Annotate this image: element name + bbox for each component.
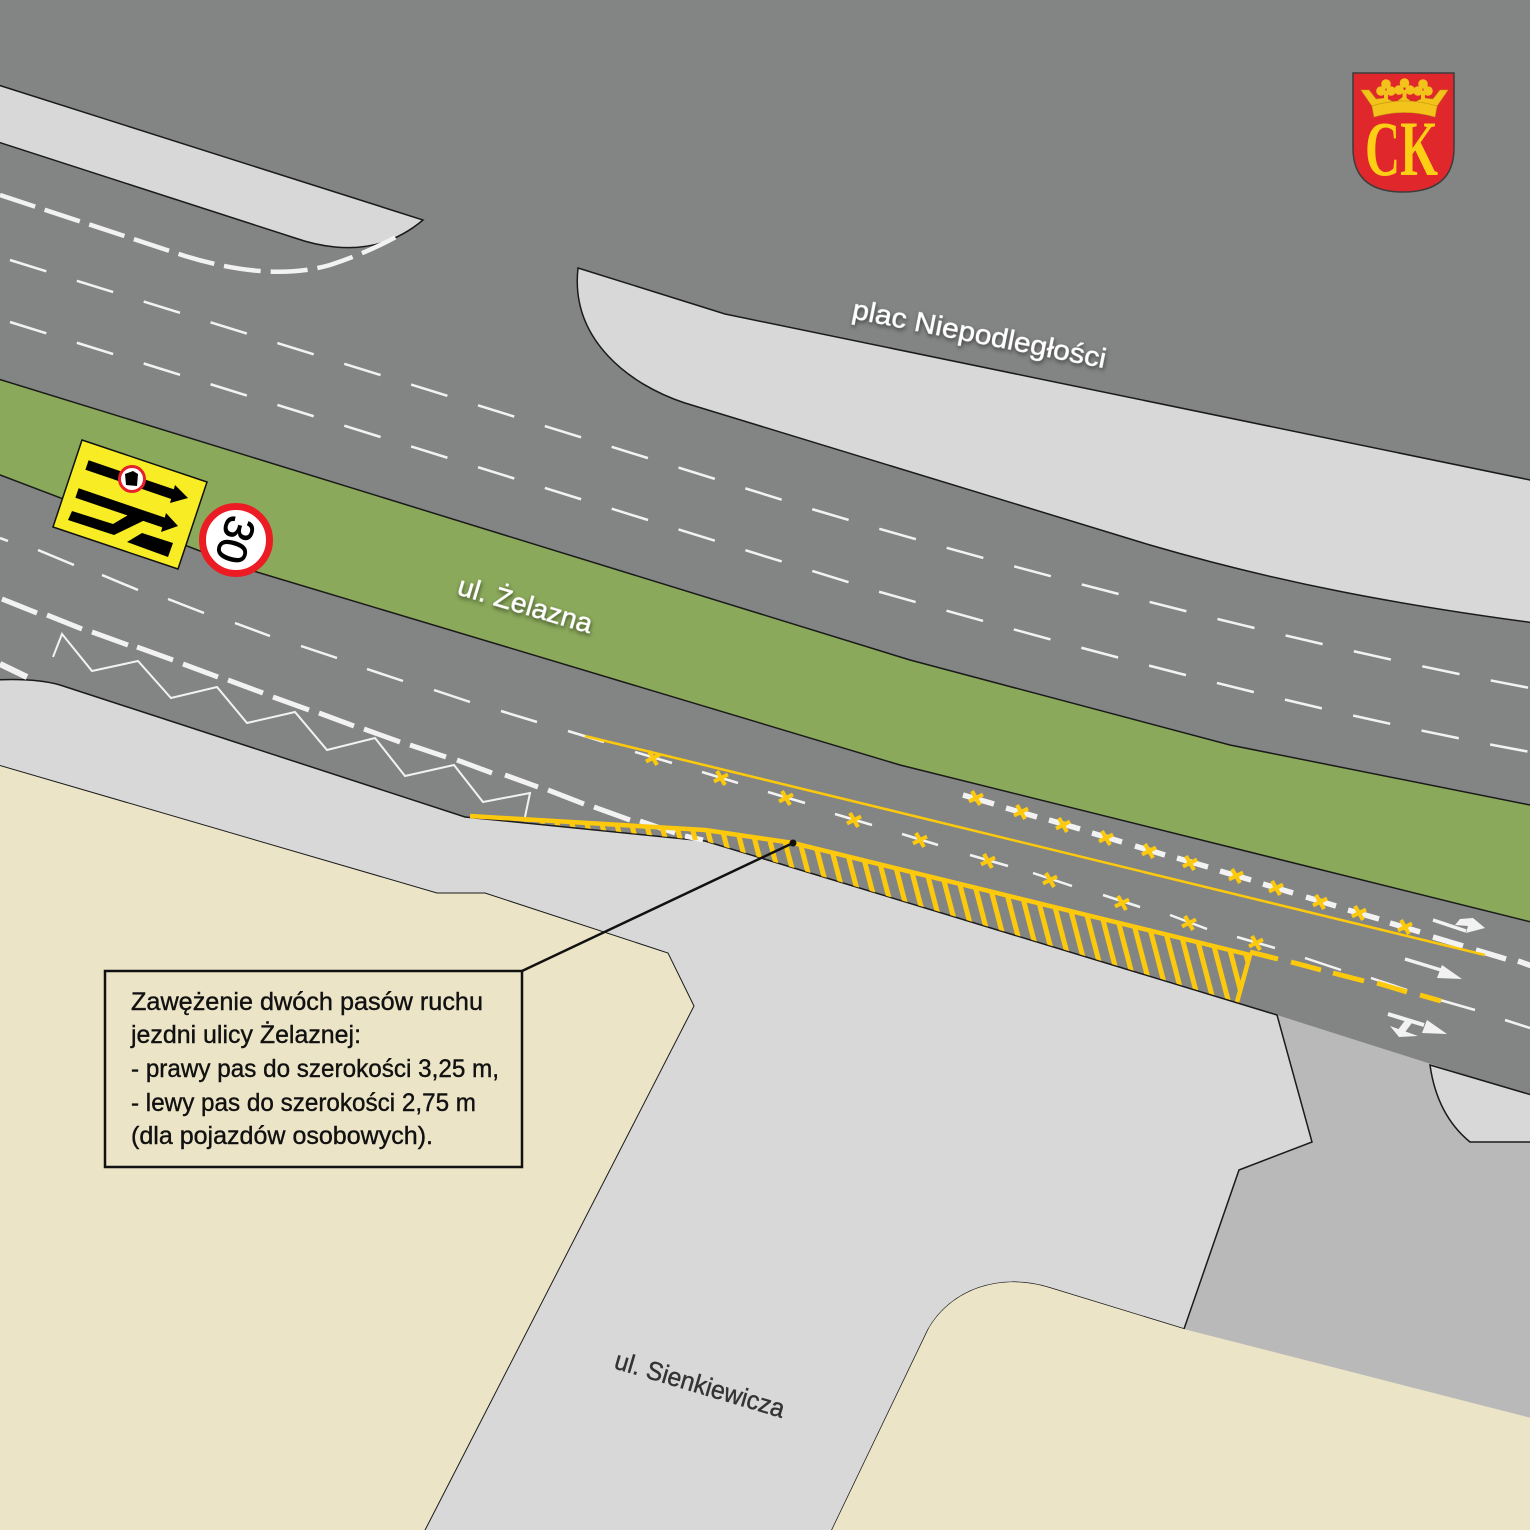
callout leader line — [522, 840, 796, 971]
callout box: (dla pojazdów osobowych). — [131, 1122, 433, 1150]
thick dash at road edge — [0, 664, 27, 677]
green median strip — [0, 378, 1530, 923]
label: ul. Żelazna: ul. Żelazna — [454, 570, 597, 639]
yellow cancel crosses — [646, 751, 1412, 950]
yellow hatched narrowing area — [470, 816, 1250, 1002]
callout box: - lewy pas do szerokości 2,75 m — [131, 1089, 476, 1117]
coat of arms of Kielce: CK — [1365, 105, 1438, 192]
callout box: Zawężenie dwóch pasów ruchu — [131, 988, 483, 1016]
speed limit sign 30: 30 — [206, 511, 265, 569]
upper lane dashed line — [10, 260, 1530, 688]
lower lane dashed line — [0, 538, 1530, 1028]
small traffic island right — [1430, 1065, 1530, 1142]
beige block left — [0, 764, 694, 1530]
yellow dashes after hatching — [1250, 952, 1441, 1001]
second lane dashed line — [10, 322, 1530, 752]
label: ul. Sienkiewicza: ul. Sienkiewicza — [611, 1345, 789, 1424]
arrow: straight and left — [1388, 1014, 1447, 1037]
label: plac Niepodległości: plac Niepodległości — [850, 293, 1109, 374]
yellow solid lane line — [585, 736, 1485, 955]
dark grey side area — [1184, 1015, 1530, 1420]
zigzag marking — [53, 634, 530, 817]
traffic island plac Niepodległości — [577, 268, 1530, 623]
thick dashed curve at top left — [0, 195, 403, 272]
thick dashed line right — [963, 795, 1530, 966]
arrow: turn right — [1433, 918, 1485, 933]
thick dashed line left — [2, 599, 703, 840]
callout box — [105, 971, 522, 1167]
yellow traffic organisation sign — [53, 440, 207, 569]
light grey sidewalk and ul. Sienkiewicza — [0, 680, 1312, 1530]
arrow: straight — [1405, 959, 1462, 979]
traffic island top left — [0, 84, 423, 248]
callout box: - prawy pas do szerokości 3,25 m, — [131, 1055, 499, 1083]
coat of arms of Kielce — [1353, 73, 1454, 192]
callout box: jezdni ulicy Żelaznej: — [130, 1020, 361, 1049]
beige block right — [830, 1282, 1530, 1530]
